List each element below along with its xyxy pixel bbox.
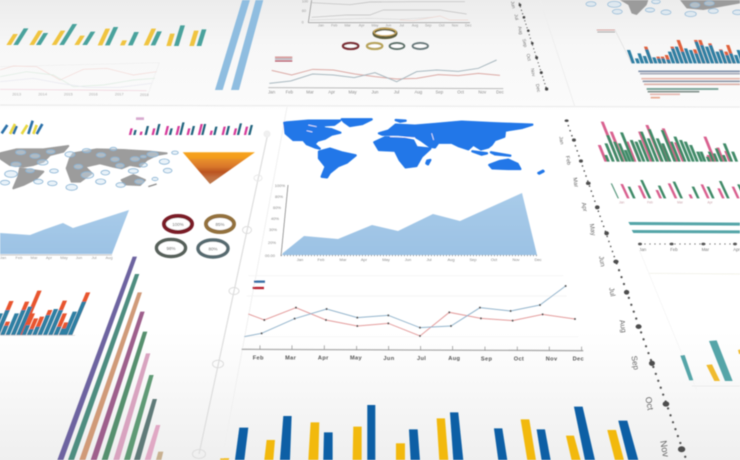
top centre faint line chart: May xyxy=(372,24,379,28)
right small pink and green bar chart: Apr xyxy=(707,201,713,205)
top line chart with legend: Oct xyxy=(457,89,465,94)
top line chart with legend: Nov xyxy=(478,89,487,94)
top-right gray map fragment xyxy=(586,0,740,17)
bottom axis labels: Sep xyxy=(469,257,477,262)
left area chart: Aug xyxy=(105,255,113,260)
central line chart xyxy=(242,276,584,362)
timeline month labels: Nov xyxy=(658,440,671,458)
month labels: Feb xyxy=(253,356,264,362)
left axis labels: 60% xyxy=(273,205,281,210)
top-right horizontal bar chart xyxy=(638,71,740,98)
right small pink and green bar chart: Feb xyxy=(647,201,653,205)
left stacked bar chart xyxy=(0,291,89,335)
top timeline with dots: Jul xyxy=(513,14,519,20)
ring 100%: 100% xyxy=(172,222,184,227)
top timeline with dots xyxy=(510,0,548,93)
bottom axis labels xyxy=(297,257,542,262)
bottom axis labels: Mar xyxy=(340,257,347,262)
top centre faint line chart: Oct xyxy=(439,24,444,28)
timeline month labels: May xyxy=(588,223,597,237)
right teal horizontal bars and dotted axis: Apr xyxy=(733,247,740,252)
top centre faint line chart: Dec xyxy=(465,24,472,28)
left area chart xyxy=(0,210,129,260)
top line chart with legend: Mar xyxy=(306,89,314,94)
top centre faint line chart: Feb xyxy=(331,24,337,28)
top centre faint line chart: Jun xyxy=(385,24,391,28)
month labels: Jun xyxy=(383,356,395,362)
top line chart with legend: Feb xyxy=(286,89,294,94)
left area chart: Jun xyxy=(76,255,82,260)
top row ring gauges xyxy=(343,43,428,49)
ring 80%: 80% xyxy=(208,246,218,252)
month labels: Aug xyxy=(448,356,460,362)
large ring gauge top xyxy=(374,28,396,38)
top-left teal and yellow bar chart xyxy=(0,24,205,46)
top centre faint line chart: Nov xyxy=(452,24,458,28)
bottom axis labels: Jul xyxy=(426,257,432,262)
timeline month labels: Feb xyxy=(564,155,571,166)
top line chart with legend: Dec xyxy=(496,89,505,94)
right teal horizontal bars and dotted axis: Jan xyxy=(639,247,647,252)
timeline month labels: Mar xyxy=(571,177,579,188)
top-left faint line chart: 2018 xyxy=(140,92,150,97)
timeline month labels xyxy=(557,136,671,458)
right teal horizontal bars and dotted axis: Feb xyxy=(670,247,678,252)
top-left faint line chart: 2017 xyxy=(115,91,125,96)
orange funnel xyxy=(183,152,255,184)
bottom axis labels: Feb xyxy=(318,257,325,262)
top-left faint line chart: 2013 xyxy=(12,91,22,96)
small pink and teal bar chart xyxy=(130,117,252,135)
legend top line chart xyxy=(275,57,292,61)
legend stacked chart xyxy=(597,30,615,32)
top line chart with legend: Apr xyxy=(328,89,336,94)
top line chart with legend: Jul xyxy=(394,89,399,94)
bottom axis labels: Oct xyxy=(491,257,498,262)
ring 98%: 98% xyxy=(166,246,176,251)
month labels: Mar xyxy=(285,356,297,362)
blue world map xyxy=(284,119,544,177)
top line chart with legend: May xyxy=(349,89,358,94)
top timeline with dots: Sep xyxy=(521,38,528,48)
bottom axis labels: May xyxy=(382,257,390,262)
month labels: Oct xyxy=(514,356,524,362)
large diagonal multicolor bars xyxy=(57,257,163,460)
lower-right small teal and yellow bars xyxy=(680,340,740,386)
top line chart with legend: Aug xyxy=(414,89,423,94)
left area chart: Mar xyxy=(31,255,38,260)
left axis labels: 20% xyxy=(268,240,276,245)
top-left faint line chart: 2016 xyxy=(89,91,99,96)
timeline month labels: Aug xyxy=(618,319,629,333)
left axis labels: 00.00 xyxy=(265,253,276,258)
top-left faint line chart: 2015 xyxy=(64,91,74,96)
top timeline with dots: Nov xyxy=(530,68,537,78)
timeline month labels: Jul xyxy=(607,287,616,297)
large right timeline with months xyxy=(557,119,687,460)
small blue and yellow bars left xyxy=(2,121,42,134)
bottom axis labels: Nov xyxy=(512,257,520,262)
month labels: Apr xyxy=(318,356,329,362)
top centre faint line chart: 60 xyxy=(302,9,306,13)
top line chart with legend xyxy=(268,57,505,94)
centre area chart xyxy=(265,183,542,262)
right small pink and green bar chart: Mar xyxy=(677,201,684,205)
top centre faint line chart: Apr xyxy=(359,24,365,28)
top timeline with dots: Jun xyxy=(510,0,516,9)
left area chart: Apr xyxy=(46,255,53,260)
left axis labels: 80% xyxy=(275,194,283,199)
top centre faint line chart: 0 xyxy=(302,20,304,24)
left axis labels: 100% xyxy=(275,183,285,188)
bottom axis labels: Dec xyxy=(534,257,542,262)
timeline month labels: Oct xyxy=(643,396,656,412)
bottom axis labels: Apr xyxy=(361,257,368,262)
top centre faint line chart: Aug xyxy=(412,24,418,28)
top-right stacked bar chart xyxy=(597,30,740,63)
month labels: Nov xyxy=(546,356,558,362)
top timeline with dots: Oct xyxy=(526,53,532,62)
month labels: Jul xyxy=(417,356,426,362)
timeline month labels: Jan xyxy=(557,136,565,145)
left axis labels xyxy=(265,183,285,258)
right teal horizontal bars and dotted axis xyxy=(628,222,740,390)
left area chart: Feb xyxy=(16,255,23,260)
left axis labels: 40% xyxy=(271,216,279,221)
left axis labels: 30% xyxy=(269,227,277,232)
right pink and green bar chart xyxy=(590,122,737,162)
ring gauges mid xyxy=(156,216,234,257)
month labels: May xyxy=(350,356,362,362)
left area chart: Jul xyxy=(91,255,97,260)
timeline month labels: Sep xyxy=(629,355,641,371)
top centre faint line chart: Mar xyxy=(344,24,352,28)
top centre faint line chart xyxy=(302,0,472,28)
gray world map with markers xyxy=(0,146,178,190)
top-left faint line chart: 2014 xyxy=(38,91,48,96)
month labels: Dec xyxy=(573,356,584,362)
light blue double stripes xyxy=(215,0,263,90)
bottom axis labels: Jun xyxy=(405,257,411,262)
left area chart: May xyxy=(60,255,68,260)
top line chart with legend: Jun xyxy=(371,89,379,94)
month labels xyxy=(253,356,584,362)
top timeline with dots: Aug xyxy=(517,26,524,35)
timeline month labels: Jun xyxy=(597,255,606,268)
right small pink and green bar chart xyxy=(610,180,740,205)
timeline month labels: Apr xyxy=(580,202,587,212)
top centre faint line chart: Jul xyxy=(399,24,404,28)
top line chart with legend: Sep xyxy=(435,89,444,94)
top centre faint line chart: Sep xyxy=(425,24,432,28)
top line chart with legend: Jan xyxy=(268,89,276,94)
bottom axis labels: Jan xyxy=(297,257,303,262)
top timeline with dots: Dec xyxy=(535,83,542,93)
bottom blue and yellow bar chart xyxy=(220,405,638,460)
top centre faint line chart: Jan xyxy=(318,24,324,28)
line chart legend xyxy=(253,282,265,288)
right teal horizontal bars and dotted axis: Mar xyxy=(702,247,710,252)
bottom axis labels: Aug xyxy=(447,257,455,262)
ring 85%: 85% xyxy=(215,222,225,227)
thin vertical timeline with circles xyxy=(192,131,270,458)
top-left faint line chart xyxy=(0,63,159,97)
right small pink and green bar chart: Jan xyxy=(619,201,624,205)
month labels: Sep xyxy=(481,356,493,362)
